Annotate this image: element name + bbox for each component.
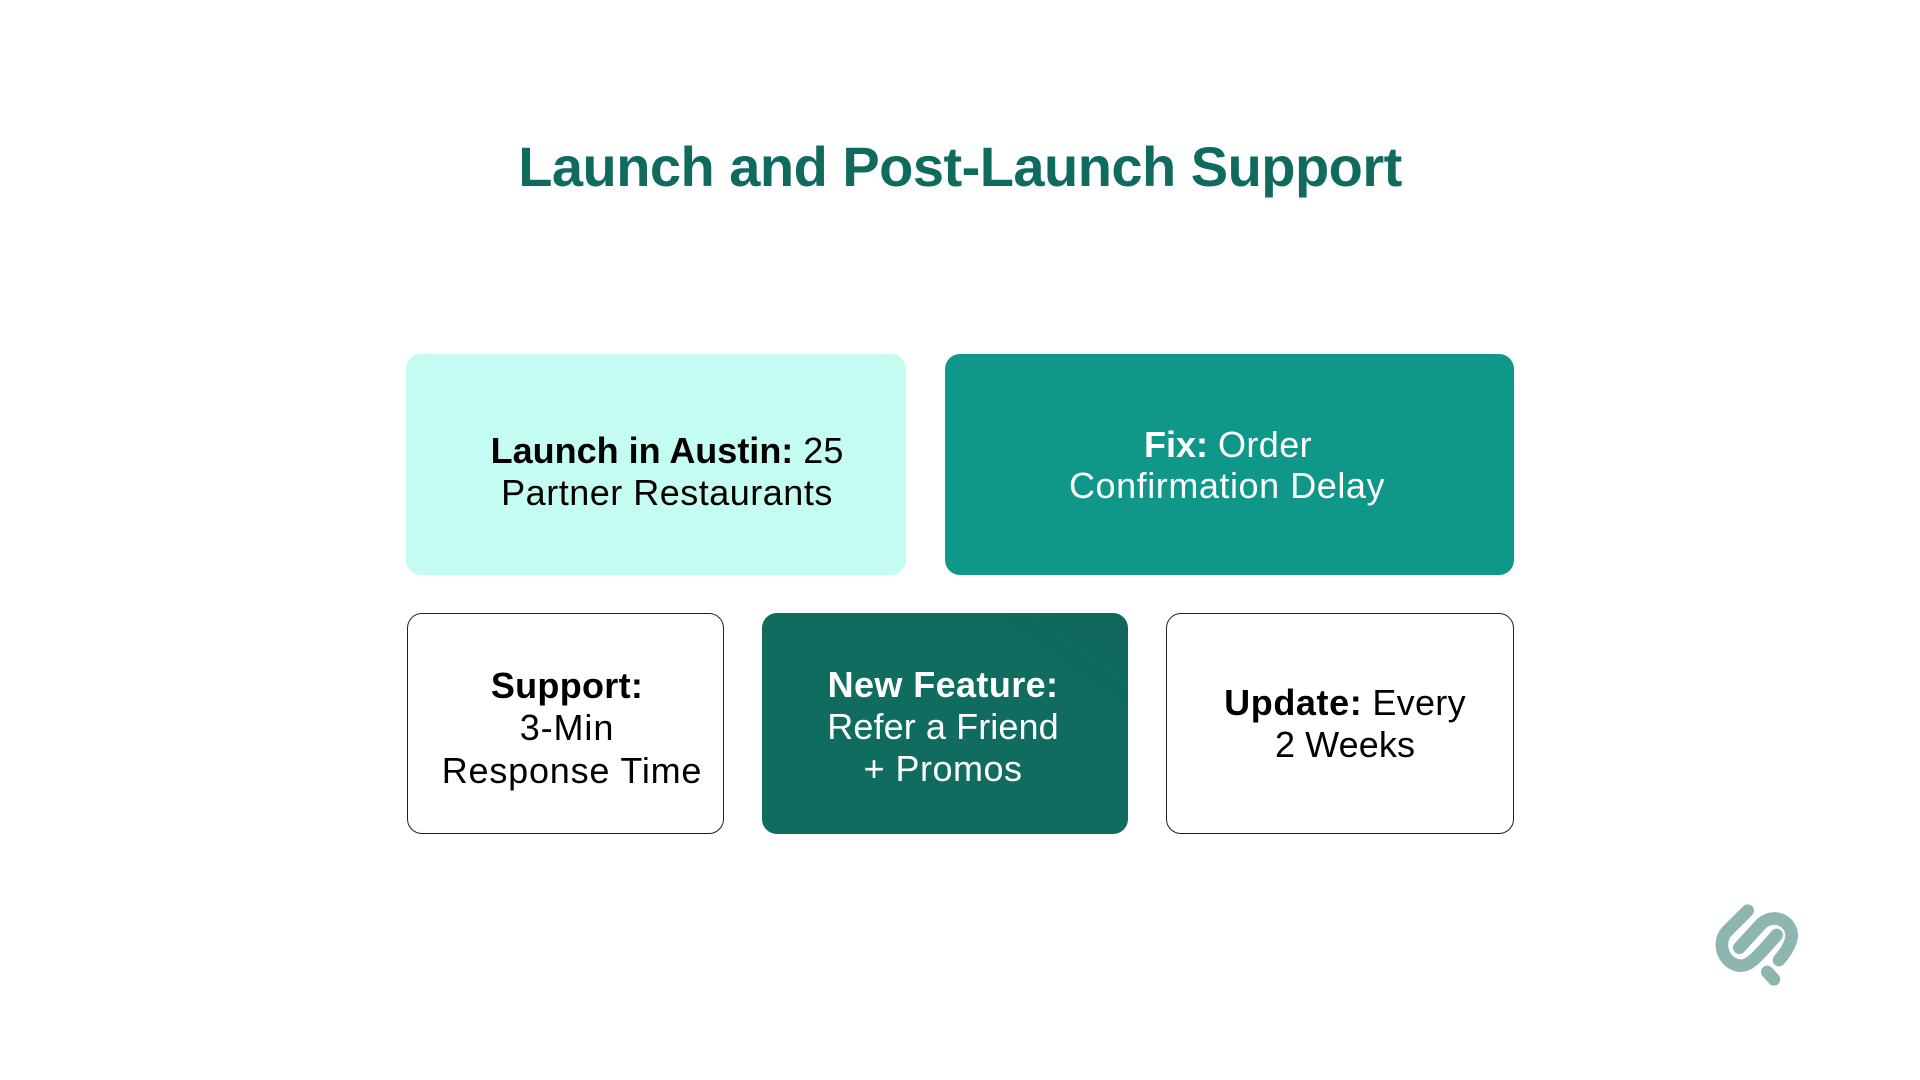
panel: new feature bbox=[762, 613, 1128, 834]
text: new feature: New Feature: bbox=[828, 664, 1058, 705]
text: fix: Confirmation Delay bbox=[1069, 465, 1385, 506]
text: update bbox=[1224, 682, 1466, 765]
text: fix: Fix: Order bbox=[1144, 424, 1312, 465]
text: support: Response Time bbox=[442, 750, 702, 791]
text: update: Update: Every bbox=[1224, 682, 1466, 723]
panel: fix bbox=[945, 354, 1514, 575]
text: new feature: + Promos bbox=[863, 748, 1023, 789]
panel: support bbox=[407, 613, 724, 834]
text: support bbox=[442, 665, 702, 791]
text: launch: Partner Restaurants bbox=[501, 472, 833, 513]
icon: logo bbox=[1716, 904, 1798, 986]
text: support: 3-Min bbox=[520, 707, 614, 748]
text: fix bbox=[1069, 424, 1385, 506]
text: launch bbox=[491, 430, 843, 513]
text: support: Support: bbox=[491, 665, 643, 706]
text: new feature: Refer a Friend bbox=[827, 706, 1059, 747]
panel: update bbox=[1166, 613, 1514, 834]
text: update: 2 Weeks bbox=[1275, 724, 1415, 765]
text: new feature bbox=[827, 664, 1059, 789]
text: launch: Launch in Austin: 25 bbox=[491, 430, 843, 471]
panel: launch in Austin bbox=[406, 354, 906, 575]
title: Launch and Post-Launch Support bbox=[518, 135, 1402, 198]
